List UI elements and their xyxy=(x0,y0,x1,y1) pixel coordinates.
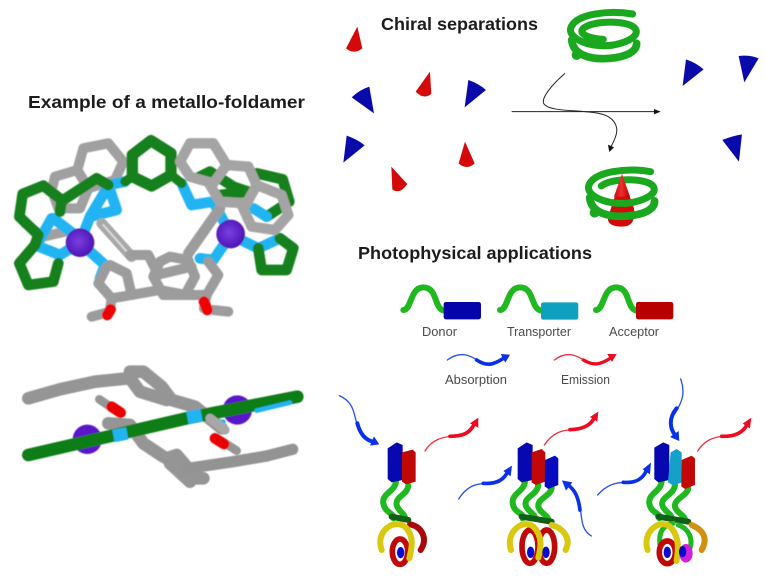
absorption arrow 2b xyxy=(562,480,591,536)
label: transporter: Transporter xyxy=(507,325,571,339)
gray diagonal rods xyxy=(102,223,132,257)
arcs xyxy=(660,523,673,545)
assembly 2: two donors and acceptor xyxy=(459,412,598,563)
legend xyxy=(403,287,673,364)
absorption arrow 3a xyxy=(598,463,651,495)
helix: free xyxy=(570,12,637,59)
title: chiral separations: Chiral separations xyxy=(381,14,538,34)
absorption arrow 2a xyxy=(459,466,512,499)
strands xyxy=(383,482,396,518)
green rings left xyxy=(19,178,108,285)
helix with bound cone xyxy=(588,170,655,227)
absorption arrow xyxy=(447,354,510,364)
green ring right xyxy=(258,238,293,270)
red oxygen atoms xyxy=(112,407,224,444)
back gray rings left xyxy=(25,143,123,237)
molecule: side view xyxy=(28,372,297,482)
label: donor: Donor xyxy=(422,325,457,339)
purple metal atoms xyxy=(73,425,102,454)
purple metal atoms xyxy=(66,228,94,257)
strands xyxy=(513,482,525,518)
title: photophysical applications: Photophysical applications xyxy=(358,243,592,263)
gray chains behind xyxy=(28,372,222,482)
assemblies xyxy=(339,379,751,564)
chromophore blocks xyxy=(518,442,533,482)
green center ring xyxy=(132,141,171,186)
legend item: transporter xyxy=(500,287,578,320)
arcs xyxy=(410,524,424,550)
absorption arrow 1 xyxy=(339,396,379,446)
emission arrow xyxy=(554,354,617,364)
absorption arrow 3b xyxy=(670,379,683,441)
central arrow xyxy=(512,73,657,147)
chromophore blocks xyxy=(388,442,403,482)
chromophore blocks xyxy=(654,442,669,482)
assembly 3: donor, transporter and acceptor xyxy=(598,379,751,564)
label: absorption: Absorption xyxy=(445,373,507,387)
chiral separation diagram xyxy=(343,12,759,227)
emission arrow 1 xyxy=(425,418,478,451)
title: example of a metallo-foldamer: Example of a metallo-foldamer xyxy=(28,92,305,112)
blue bonds left xyxy=(35,182,125,278)
arrowheads xyxy=(654,109,661,114)
green rod xyxy=(28,397,297,455)
assembly 1: donor and acceptor xyxy=(339,396,478,564)
red oxygen atoms xyxy=(107,302,207,315)
emission arrow 2 xyxy=(544,412,598,445)
blue segments xyxy=(113,415,202,436)
molecule: top view xyxy=(19,141,293,317)
gray rings right xyxy=(180,143,288,230)
blue bonds right xyxy=(182,183,280,260)
label: emission: Emission xyxy=(561,373,610,387)
back green rings right xyxy=(197,172,289,217)
red cones xyxy=(346,27,475,191)
emission arrow 3 xyxy=(698,418,751,451)
gray chain front xyxy=(188,449,293,468)
legend item: donor xyxy=(403,287,481,319)
strands xyxy=(649,482,662,518)
arcs xyxy=(522,530,538,563)
gray rings bottom xyxy=(92,255,228,317)
legend item: acceptor xyxy=(596,287,673,319)
blue cones xyxy=(343,56,759,163)
label: acceptor: Acceptor xyxy=(609,325,659,339)
